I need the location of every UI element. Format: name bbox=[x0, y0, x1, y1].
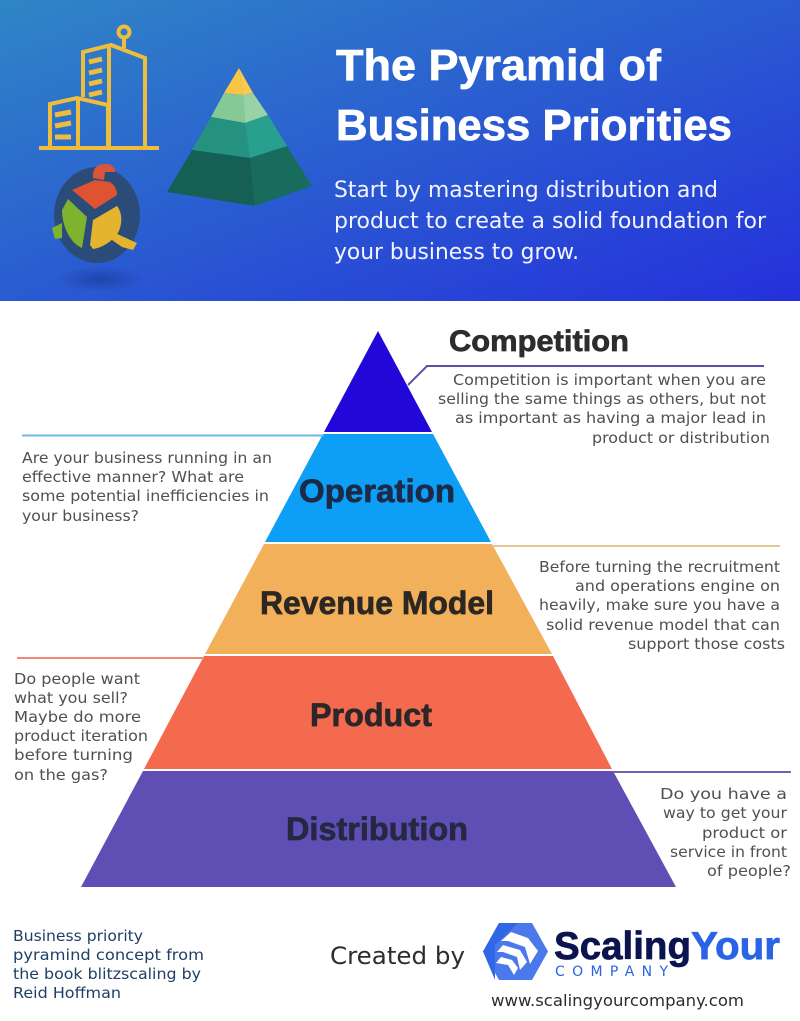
callout: operation: some potential inefficiencies in bbox=[22, 487, 269, 505]
callout: product: product iteration bbox=[14, 727, 148, 745]
layer: operation bbox=[265, 434, 491, 542]
subtitle: Start by mastering distribution and bbox=[334, 178, 718, 203]
callout: distribution: service in front bbox=[670, 843, 787, 861]
subtitle: product to create a solid foundation for bbox=[334, 209, 767, 234]
layer: distribution bbox=[81, 771, 676, 887]
layer: revenue model: Revenue Model bbox=[260, 585, 494, 621]
callout: operation: Are your business running in an bbox=[22, 449, 272, 467]
callout: revenue model: Before turning the recruitment bbox=[539, 558, 780, 576]
callout: operation bbox=[22, 436, 324, 525]
layer: revenue model bbox=[205, 544, 552, 654]
created by: Created by bbox=[330, 942, 465, 970]
logo bbox=[483, 923, 780, 1010]
callout: distribution: of people? bbox=[707, 862, 791, 880]
callout: revenue model: heavily, make sure you have a bbox=[539, 596, 780, 614]
logo: COMPANY bbox=[555, 964, 668, 980]
layer: operation: Operation bbox=[299, 473, 455, 509]
callout: product: what you sell? bbox=[14, 689, 128, 707]
title: Business Priorities bbox=[336, 101, 732, 150]
wordmark: Scaling bbox=[554, 925, 691, 968]
subtitle: your business to grow. bbox=[334, 240, 579, 265]
layer: product: Product bbox=[310, 697, 432, 733]
title bbox=[336, 41, 732, 150]
source note: Business priority bbox=[13, 927, 143, 945]
icon: 3D pyramid bbox=[167, 68, 312, 206]
callout: competition: as important as having a major lead in bbox=[455, 409, 766, 427]
logo: Your bbox=[691, 925, 780, 968]
callout: revenue model: solid revenue model that can bbox=[546, 616, 780, 634]
callout: product: before turning bbox=[14, 746, 133, 764]
subtitle bbox=[334, 178, 767, 265]
callout: competition: selling the same things as others, but not bbox=[438, 390, 766, 408]
source note: pyramind concept from bbox=[13, 946, 204, 964]
icon: segmented wheel bbox=[52, 164, 140, 263]
website: www.scalingyourcompany.com bbox=[491, 991, 744, 1010]
callout: competition bbox=[408, 325, 770, 447]
callout: distribution: way to get your bbox=[663, 804, 788, 822]
callout: product: Do people want bbox=[14, 670, 140, 688]
callout: competition: product or distribution bbox=[592, 429, 770, 447]
icon: hexagon logo bbox=[483, 923, 548, 980]
icon: shadow bbox=[56, 266, 144, 292]
callout: operation: your business? bbox=[22, 507, 139, 525]
callout: revenue model: and operations engine on bbox=[575, 577, 780, 595]
callout: distribution: product or bbox=[702, 824, 788, 842]
source note: the book blitzscaling by bbox=[13, 965, 201, 983]
layer: distribution: Distribution bbox=[286, 811, 468, 847]
title: The Pyramid of bbox=[336, 41, 661, 90]
callout: competition: Competition is important when you are bbox=[453, 371, 766, 389]
layer: product bbox=[144, 656, 612, 769]
source note bbox=[13, 927, 204, 1002]
header banner bbox=[0, 0, 800, 301]
callout: revenue model: support those costs bbox=[628, 635, 785, 653]
source note: Reid Hoffman bbox=[13, 984, 121, 1002]
callout: product: Maybe do more bbox=[14, 708, 141, 726]
callout: distribution: Do you have a bbox=[660, 785, 787, 803]
icon: building bbox=[39, 26, 159, 148]
layer: competition bbox=[324, 331, 432, 432]
callout: revenue model bbox=[492, 546, 785, 653]
callout: product bbox=[14, 658, 204, 784]
callout: operation: effective manner? What are bbox=[22, 468, 244, 486]
pyramid bbox=[81, 331, 676, 887]
callout: competition: Competition bbox=[449, 325, 629, 358]
callout: product: on the gas? bbox=[14, 766, 108, 784]
callout: distribution bbox=[613, 772, 791, 880]
